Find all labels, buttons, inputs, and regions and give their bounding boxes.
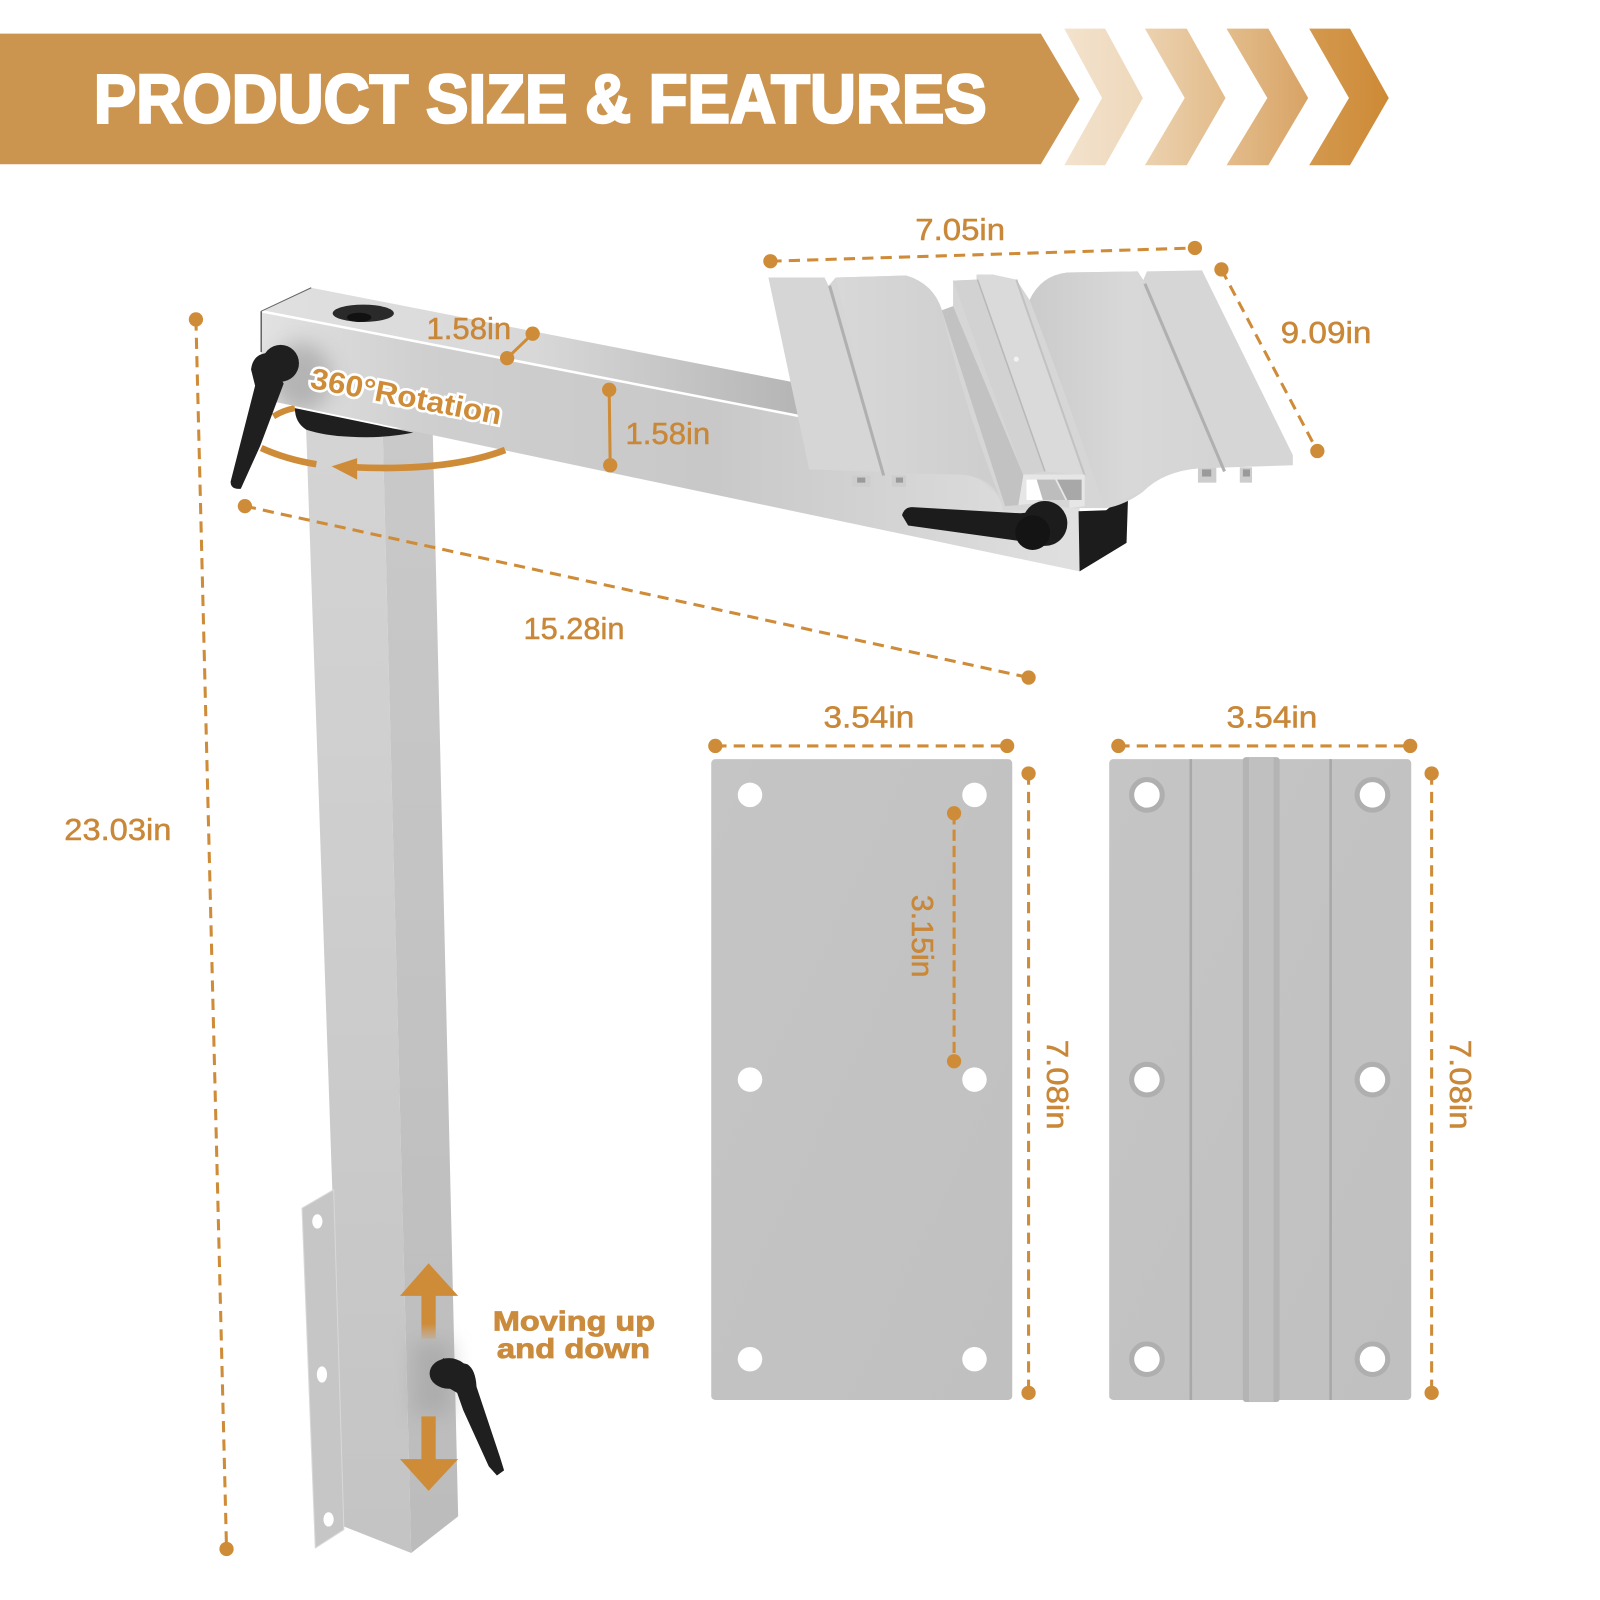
dimension: plain plate width (708, 701, 1014, 753)
dimension: plain plate height: 7.08in (1040, 1040, 1074, 1130)
arm socket hole (333, 305, 394, 322)
channel end opening (1018, 474, 1085, 508)
title banner (0, 34, 1080, 164)
dimension: arm width (427, 312, 540, 365)
dimension: total height: 23.03in (64, 813, 171, 847)
dimension: ribbed plate width: 3.54in (1227, 701, 1317, 735)
tray plate (768, 270, 1293, 510)
moving label: Moving up (493, 1306, 655, 1337)
title: PRODUCT SIZE & FEATURES (94, 61, 987, 137)
dimension: ribbed plate height: 7.08in (1443, 1040, 1477, 1130)
chevron arrows (1064, 29, 1389, 165)
dimension: tray depth (1214, 262, 1371, 458)
vertical post (306, 429, 458, 1553)
handle: lower (430, 1358, 504, 1476)
rotation label: 360°Rotation (308, 362, 504, 432)
handle: upper left (231, 345, 299, 489)
horizontal arm (261, 288, 1080, 571)
end block (1079, 482, 1129, 571)
dimension: arm height (602, 383, 710, 472)
dimension: arm width: 1.58in (427, 312, 511, 346)
plain base plate (711, 759, 1012, 1400)
dimension: tray depth: 9.09in (1281, 316, 1371, 350)
dimension: ribbed plate width (1111, 701, 1417, 753)
dimension: total height (64, 312, 234, 1556)
handle: tray lever (902, 501, 1067, 550)
dimension: arm length (238, 499, 1036, 685)
collar (295, 408, 413, 437)
dimension: tray width (763, 213, 1202, 268)
dimension: hole spacing: 3.15in (905, 895, 939, 978)
moving label: and down (497, 1333, 650, 1364)
arrow: moving up (400, 1263, 458, 1339)
dimension: hole spacing (905, 806, 961, 1068)
dimension: arm length: 15.28in (523, 612, 624, 646)
mounting flange (302, 1190, 344, 1548)
dimension: plain plate height (1021, 766, 1074, 1400)
rotation arrow (261, 448, 505, 480)
dimension: tray width: 7.05in (915, 213, 1005, 247)
arrow: moving down (400, 1416, 458, 1491)
ribbed base plate (1109, 757, 1411, 1402)
dimension: plain plate width: 3.54in (823, 701, 914, 735)
moving label (493, 1306, 655, 1364)
table mount assembly (231, 270, 1293, 1553)
dimension: arm height: 1.58in (626, 417, 710, 451)
dimension: ribbed plate height (1424, 766, 1477, 1400)
rotation arrow back arc (273, 408, 295, 416)
